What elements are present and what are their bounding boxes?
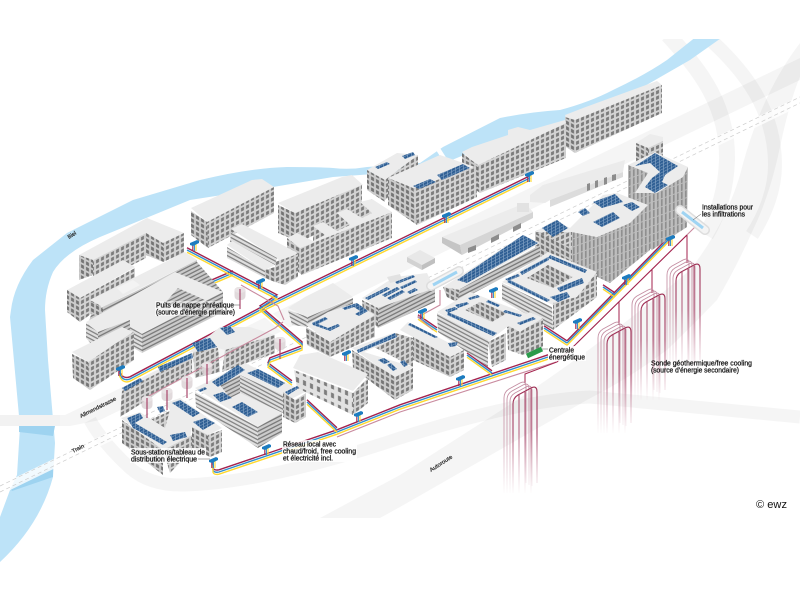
building: solar block	[388, 155, 477, 225]
building: courtyard block	[502, 252, 597, 330]
building: north slab	[191, 179, 274, 248]
building: long shed	[530, 160, 625, 207]
building: south-west long block	[120, 326, 275, 417]
infiltration unit upper right	[680, 210, 705, 230]
small box	[407, 250, 435, 270]
place label: train: Train	[71, 444, 85, 455]
building: central solar block	[362, 273, 435, 328]
place label: motorway: Autoroute	[429, 454, 454, 474]
label: energy plant: énergétique	[549, 354, 585, 362]
building: stepped block	[227, 224, 298, 285]
label: local network: et électricité incl.	[283, 456, 333, 462]
label: local network	[282, 440, 357, 462]
building: curved facade block	[535, 193, 650, 283]
label: substations: Sous-stations/tableau de	[131, 450, 205, 456]
geothermal probe field 3	[632, 289, 665, 400]
label: infiltrations: Installations pour	[702, 204, 754, 212]
label: geothermal probes: (source d'énergie secondaire)	[651, 368, 739, 374]
network pipes	[119, 176, 695, 474]
building: shed	[442, 203, 533, 255]
pink groundwater pipe	[147, 285, 284, 397]
building: tower with solar roof	[628, 152, 688, 250]
place label: street: Allmendstrasse	[79, 396, 118, 420]
geothermal probe field 1	[504, 382, 537, 493]
road across river	[19, 415, 54, 426]
river	[0, 36, 724, 562]
railway	[0, 97, 800, 492]
well 3	[182, 376, 192, 398]
building: north-west L block	[79, 218, 184, 285]
well 1	[142, 396, 152, 418]
infiltration unit centre	[431, 271, 459, 286]
bridge shadows	[10, 426, 55, 491]
building: west small block	[67, 260, 135, 322]
building: centre L block	[352, 322, 464, 400]
geothermal probe field 4	[667, 259, 700, 370]
building: west courtyard block	[86, 272, 223, 358]
substations	[116, 171, 675, 468]
building: river block	[367, 152, 418, 202]
label: infiltrations: les infiltrations	[702, 212, 745, 218]
building: north comb block back	[278, 175, 363, 245]
building: west block front	[72, 327, 134, 390]
building: west long slab	[86, 252, 223, 352]
label: local network: chaud/froid, free cooling	[283, 448, 356, 456]
label: local network: Réseau local avec	[283, 442, 336, 448]
label: wells: Puits de nappe phréatique	[156, 302, 234, 310]
label: wells	[155, 301, 240, 316]
central energy plant	[527, 349, 542, 356]
copyright: © ewz	[756, 499, 787, 511]
well 2	[162, 388, 172, 410]
label: energy plant: Centrale	[549, 348, 574, 354]
building: central low block	[288, 283, 353, 327]
building: C solar block	[306, 303, 375, 357]
building: long solar block	[443, 235, 540, 302]
label: substations	[130, 448, 210, 464]
place label: river: Biel	[67, 231, 78, 241]
building: south block with stripes	[195, 363, 306, 448]
label: geothermal probes	[651, 360, 752, 374]
building: south-west U block	[121, 398, 222, 475]
well 6	[234, 287, 246, 309]
building: river slab	[462, 120, 566, 193]
label: infiltrations	[693, 204, 754, 220]
label: geothermal probes: Sonde géothermique/free cooling	[651, 360, 752, 368]
well 5	[274, 337, 286, 359]
well 4	[202, 362, 212, 384]
building: centre courtyard block	[437, 292, 543, 367]
building: historic block	[293, 352, 368, 415]
geothermal probe field 2	[598, 322, 631, 433]
label: wells: (source d'énergie primaire)	[156, 310, 235, 316]
building: small tower block	[636, 134, 663, 168]
river bridge small	[437, 148, 446, 157]
label: substations: distribution électrique	[131, 456, 197, 464]
building: north-east slab	[565, 81, 662, 153]
label: energy plant	[542, 346, 586, 362]
building: north comb block	[287, 199, 392, 275]
